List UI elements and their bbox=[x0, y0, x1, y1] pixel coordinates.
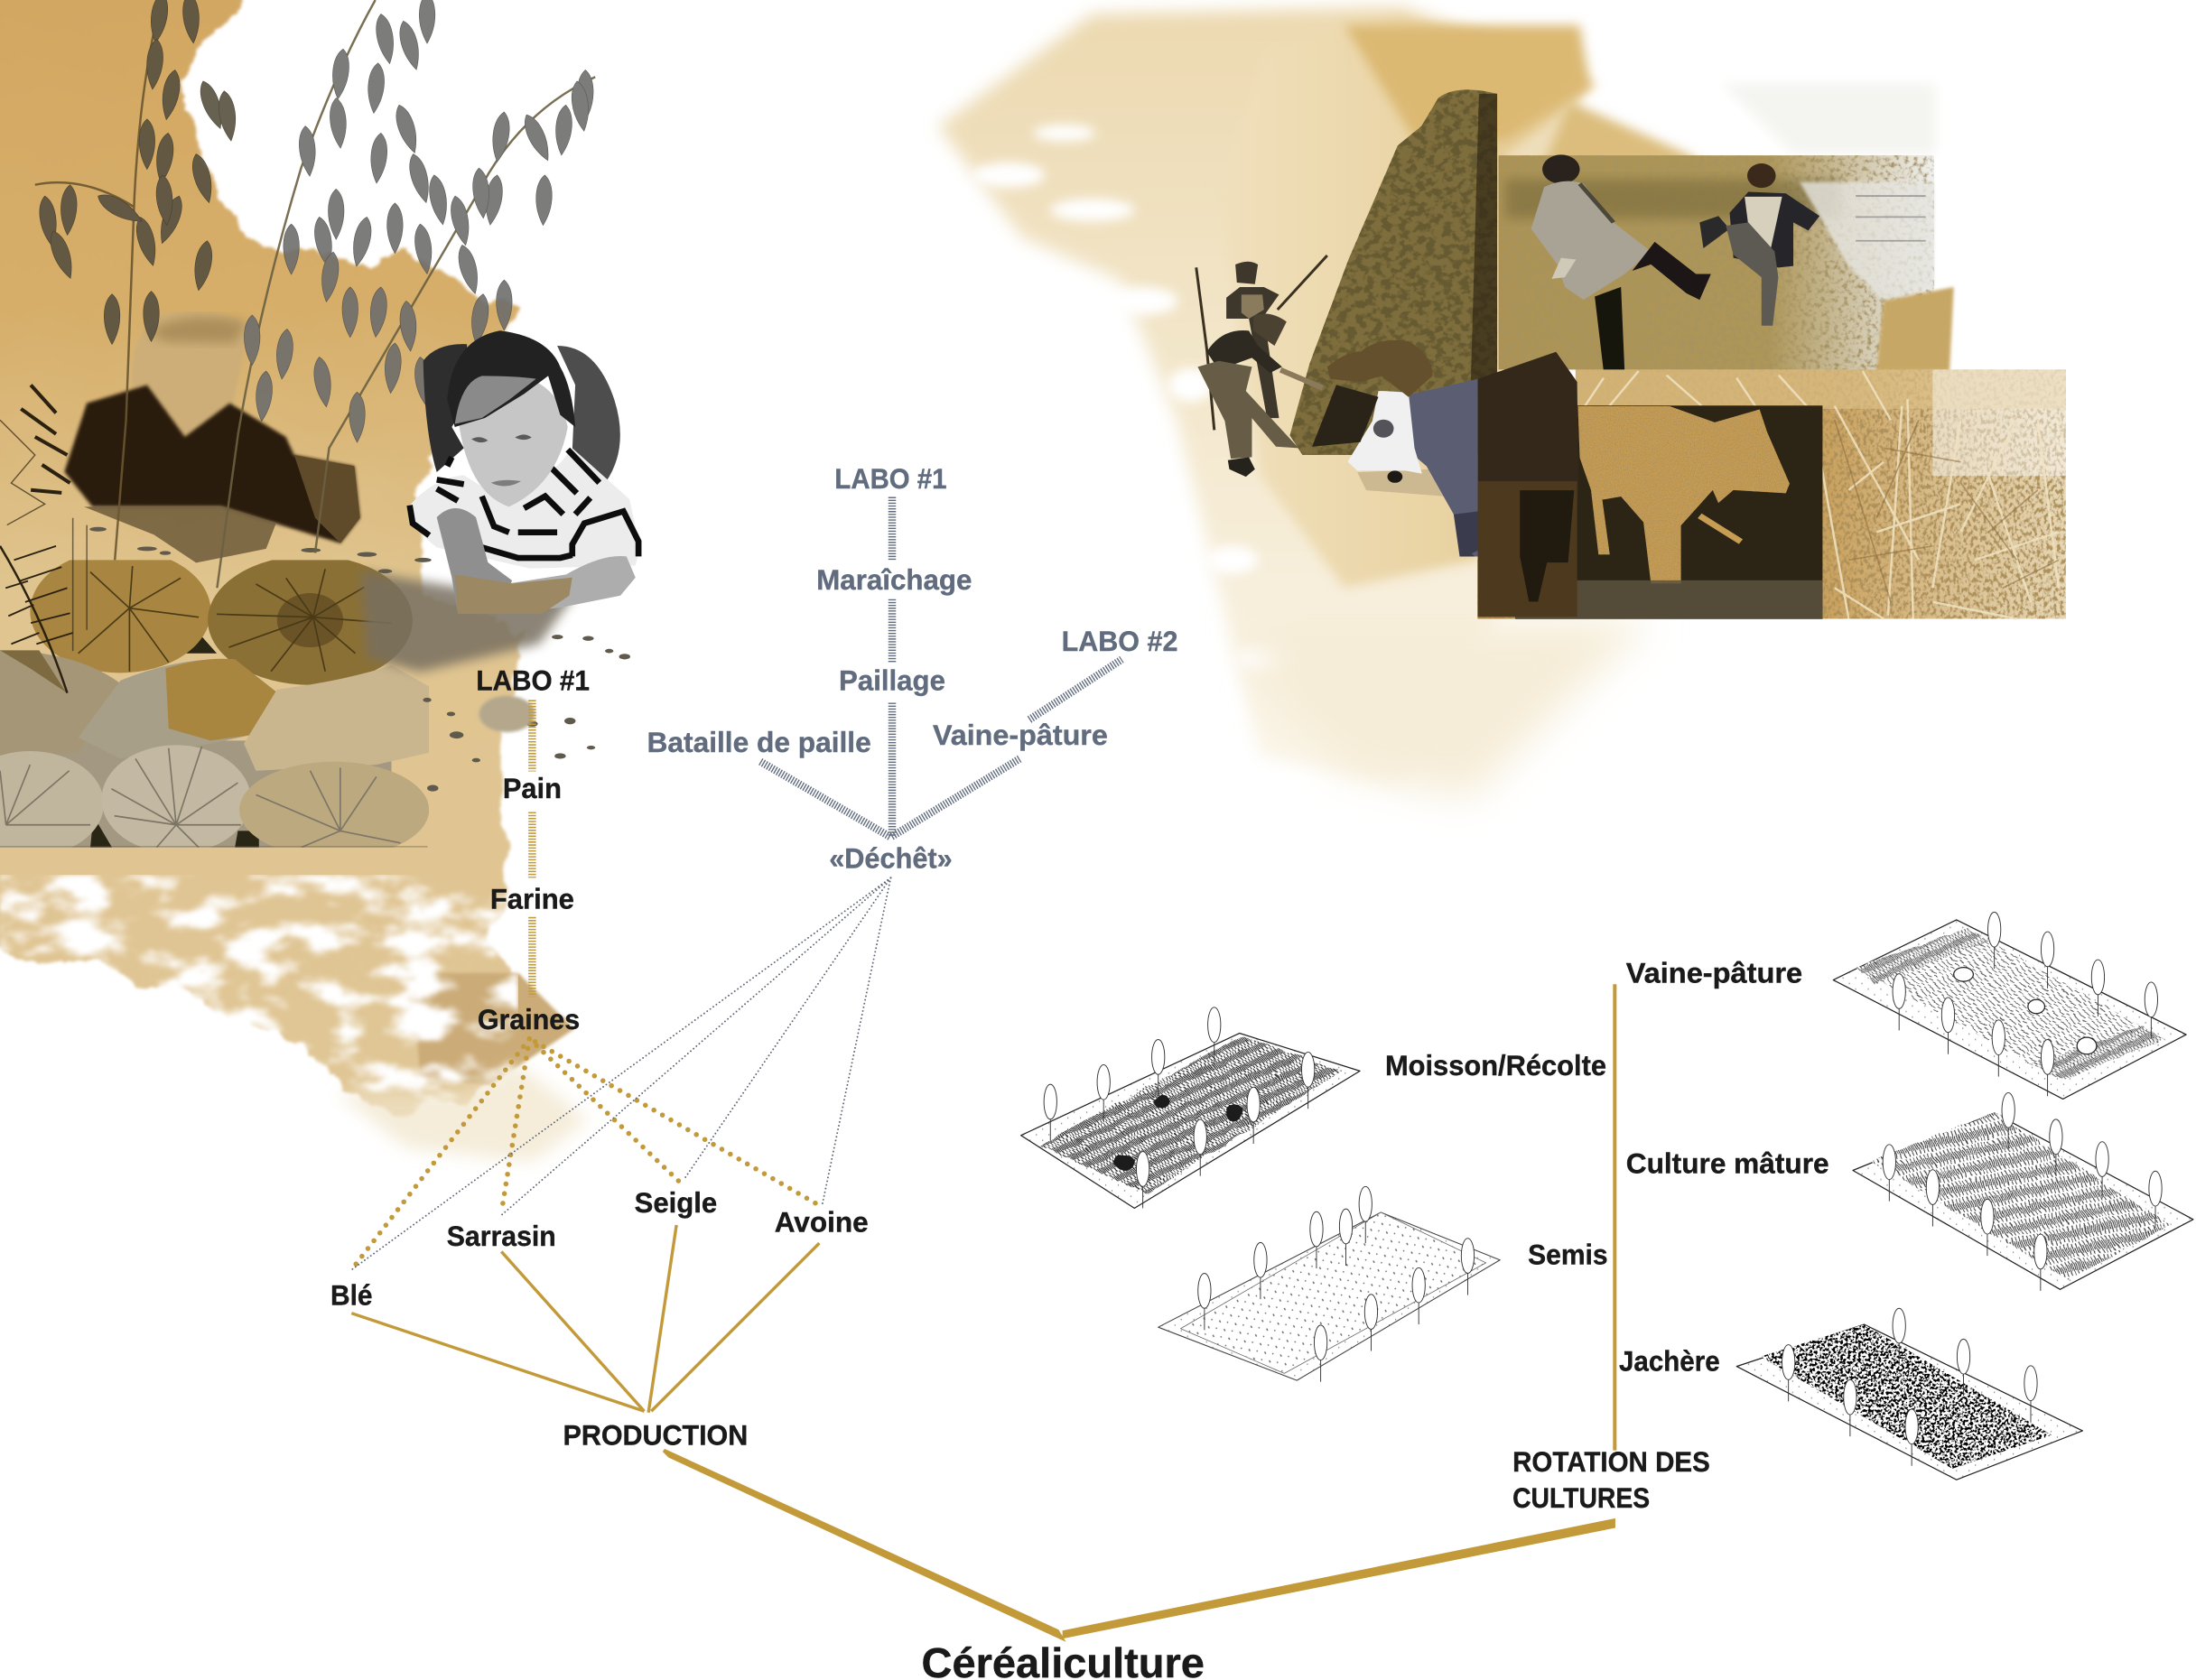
girl: face bbox=[459, 373, 568, 506]
illustration: grazing field bbox=[1833, 912, 2186, 1099]
connector: rotation vertical line bbox=[1614, 984, 1616, 1451]
photo collage: grey smudge under child's hands bbox=[361, 571, 574, 672]
label: Avoine: Avoine bbox=[775, 1206, 869, 1239]
illustration: mature crop field bbox=[1853, 1092, 2193, 1291]
girl: left hair bbox=[423, 344, 470, 472]
girl: eyes and mouth bbox=[471, 434, 532, 442]
sacks: bottom edge bbox=[0, 846, 428, 848]
cow: grey neck and foreleg bbox=[1400, 379, 1478, 556]
straw: loose stalks bbox=[1576, 371, 2059, 618]
wash: white mottling at lower edge bbox=[0, 875, 518, 1141]
photo collage: dark overlay with straw cow bbox=[1515, 405, 1822, 619]
wash: faint fragments below Graines bbox=[336, 1064, 588, 1162]
photo collage: straw panel bbox=[1477, 369, 2066, 618]
connector: Graines to cereals, gold dotted bbox=[351, 1039, 819, 1270]
connector: thick branch to PRODUCTION bbox=[664, 1451, 1062, 1638]
label: Sarrasin: Sarrasin bbox=[447, 1220, 556, 1252]
labels: crop rotation bbox=[1385, 957, 1829, 1514]
photo collage: cow bbox=[1348, 352, 1578, 617]
icon: oat stems, grey right cluster bbox=[217, 0, 595, 588]
farmer: basket bbox=[1312, 385, 1379, 447]
smudge under black LABO label bbox=[479, 696, 535, 732]
label: PRODUCTION: PRODUCTION bbox=[563, 1418, 748, 1451]
girl: hair top bbox=[447, 330, 575, 427]
label: Rotation des cultures bbox=[1512, 1445, 1710, 1514]
girl: arms and hands bbox=[437, 508, 512, 614]
label: Paillage: Paillage bbox=[839, 664, 945, 697]
photo collage: haystack bbox=[1289, 89, 1497, 455]
cow: leg bbox=[1454, 511, 1478, 556]
sacks: base bbox=[56, 740, 392, 848]
sacks: bottom row bbox=[0, 745, 429, 858]
labels: waste uses bbox=[647, 462, 1177, 875]
photo collage: footprint speckles bbox=[89, 527, 630, 792]
label: Blé: Blé bbox=[330, 1278, 373, 1311]
panel: right ochre watercolour wash bbox=[938, 7, 1936, 798]
labels: production chain bbox=[330, 664, 869, 1451]
wash: core tone bbox=[1218, 17, 1596, 588]
label: Vaine-pâture stage: Vaine-pâture bbox=[1626, 957, 1802, 989]
label: Moisson/Récolte: Moisson/Récolte bbox=[1385, 1049, 1606, 1081]
label: Graines: Graines bbox=[478, 1003, 580, 1035]
label: Pain: Pain bbox=[503, 772, 562, 804]
connector: Déchêt to uses, grey hatched bbox=[760, 497, 1121, 837]
label: Bataille de paille: Bataille de paille bbox=[647, 726, 871, 758]
hay bales bbox=[1115, 1095, 1242, 1170]
girl: fringe bbox=[455, 376, 536, 424]
photo collage: farmers bbox=[1196, 255, 1433, 477]
label: Semis: Semis bbox=[1528, 1238, 1608, 1270]
cow: dark body bbox=[1478, 352, 1578, 617]
label: Maraîchage: Maraîchage bbox=[816, 563, 972, 596]
label: Vaine-pâture: Vaine-pâture bbox=[933, 719, 1108, 751]
girl: shirt bbox=[410, 448, 640, 569]
label: LABO #1: LABO #1 bbox=[476, 664, 590, 697]
girl: ponytail bbox=[557, 346, 620, 483]
illustration: fallow field bbox=[1736, 1308, 2082, 1480]
label: Jachère: Jachère bbox=[1619, 1344, 1720, 1377]
farmer: crouching figure bbox=[1327, 340, 1433, 397]
illustration: harvest field bbox=[1021, 1007, 1360, 1208]
label: LABO #2: LABO #2 bbox=[1062, 625, 1177, 657]
right child bbox=[1699, 163, 1819, 326]
connector: cereals to PRODUCTION, gold lines bbox=[351, 1225, 819, 1413]
connector: LABO to Graines, gold hatched bbox=[530, 700, 535, 997]
wash: white flecks on the left edge bbox=[972, 125, 1298, 671]
cow: head bbox=[1348, 391, 1422, 474]
sacks: middle row bbox=[0, 650, 429, 771]
label: Farine: Farine bbox=[490, 882, 574, 914]
wash: pale outer glow bbox=[938, 7, 1583, 784]
sacks: dark gaps bbox=[90, 627, 259, 848]
farmer: pitchfork poles bbox=[1196, 255, 1327, 430]
panel: left ochre watercolour wash bbox=[0, 0, 588, 1162]
photo collage: girl in striped shirt bbox=[410, 330, 640, 614]
label: Rotation des cultures: ROTATION DES bbox=[1512, 1445, 1710, 1478]
farmer: front woman bbox=[1253, 313, 1287, 346]
farmer: rear woman bbox=[1226, 262, 1279, 418]
cow: shadow bbox=[1357, 469, 1445, 497]
photo collage: dark fern, lower left bbox=[0, 385, 87, 693]
connector: thick branch to rotation bbox=[1063, 1519, 1614, 1638]
illustration: sowing field bbox=[1158, 1186, 1500, 1382]
icon: oat stems, dark left cluster bbox=[35, 0, 239, 560]
sacks: top row bbox=[30, 550, 413, 685]
connector: Déchêt to cereals, grey dotted bbox=[351, 877, 890, 1270]
label: Culture mâture: Culture mâture bbox=[1626, 1147, 1829, 1180]
photo collage: grain sacks bbox=[0, 550, 429, 858]
label: Rotation des cultures: CULTURES bbox=[1512, 1481, 1650, 1514]
left child bbox=[1531, 154, 1711, 376]
photo collage: boy behind the oats bbox=[64, 311, 360, 562]
label: Déchêt: «Déchêt» bbox=[829, 842, 953, 875]
sheep bbox=[1954, 968, 2097, 1054]
girl: shirt stripes bbox=[410, 450, 638, 558]
label: Seigle: Seigle bbox=[635, 1186, 717, 1219]
wash: pale fade below photos bbox=[1246, 618, 1652, 798]
label: grey LABO #1: LABO #1 bbox=[834, 462, 946, 495]
wash: upper right halo bbox=[1527, 101, 1764, 210]
photo collage: children kicking in a field bbox=[1499, 154, 1954, 376]
